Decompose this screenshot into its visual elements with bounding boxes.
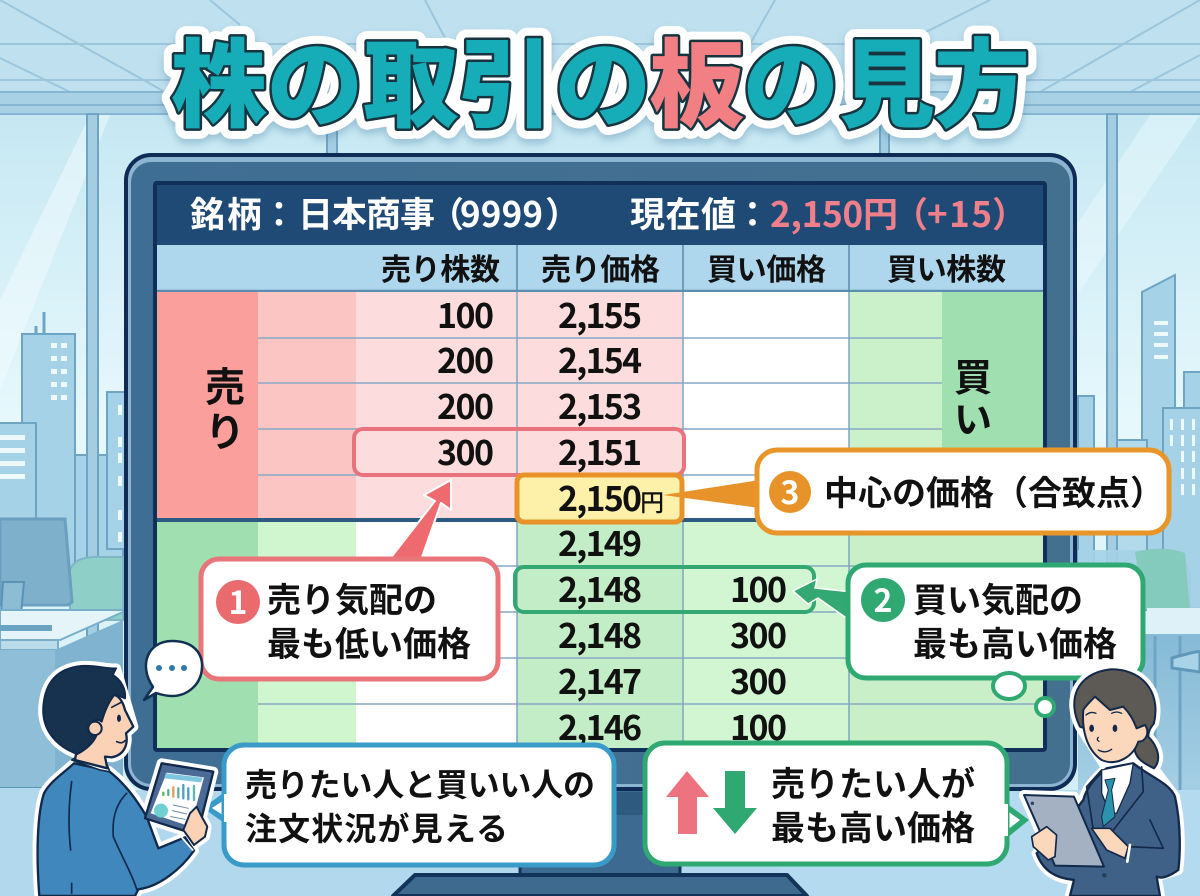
price ladder: 2,148 [558, 563, 642, 612]
title [171, 8, 1030, 147]
price ladder: 2,148 [558, 609, 642, 658]
buy quantities: 300 [730, 609, 787, 658]
buy quantities [730, 563, 787, 750]
stock name: ） [545, 187, 580, 238]
number badge 2 [861, 576, 905, 622]
sell quantities [437, 289, 494, 475]
column header row: 売り価格 [541, 245, 660, 289]
callout 1 text: 最も低い価格 [267, 617, 471, 666]
highlight: center price: 2,150円 [558, 472, 664, 521]
title dark edge: 株の取引の板の見方 [171, 8, 1030, 147]
callout 3 text: 中心の価格 [824, 466, 994, 515]
stock name: 銘柄 [190, 187, 262, 238]
current price value: +15 [927, 187, 992, 238]
current price: 現在値 [630, 187, 736, 238]
thought bubbles [993, 673, 1054, 716]
stock name: ： [262, 187, 297, 238]
number badge 1: 1 [229, 578, 247, 624]
skyline: left [0, 312, 125, 584]
column header row [157, 245, 1043, 292]
monitor frame [124, 153, 1077, 791]
icon: speech bubble [144, 641, 202, 700]
highlight: center price [517, 472, 682, 522]
price ladder [558, 289, 642, 750]
column header row: 買い株数 [887, 245, 1006, 289]
title outline: 株の取引の板の見方 [171, 8, 1030, 147]
character: man with tablet [38, 666, 213, 896]
screen: order book table [153, 181, 1047, 752]
price ladder: 2,154 [558, 334, 642, 383]
stock name: （ [429, 187, 464, 238]
sellers text: 売りたい人が [771, 757, 975, 806]
price ladder: 2,149 [558, 517, 642, 566]
price ladder: 2,155 [558, 289, 642, 338]
buy label: 買 [954, 347, 992, 402]
column header row: 買い価格 [707, 245, 826, 289]
sell label: 売 [205, 355, 245, 413]
current price value: 2,150円 [770, 187, 898, 238]
callout 1: lowest sell price [201, 480, 498, 679]
arrow: callout 1 pointer [389, 480, 451, 560]
skyline: right [1078, 275, 1200, 610]
stock name: 9999 [460, 187, 543, 238]
arrow: callout 3 pointer [663, 480, 760, 508]
current price value: （ [893, 187, 928, 238]
monitor stand [393, 745, 807, 896]
callout 3 text: 合致点 [1028, 466, 1130, 515]
sell quantities: 300 [437, 426, 494, 475]
current price value: ） [992, 187, 1027, 238]
office interior: right [1130, 553, 1190, 610]
current price: ： [735, 187, 770, 238]
sell side cells [157, 292, 1043, 520]
office interior: left [70, 557, 123, 620]
callout 1 text: 売り気配の [267, 573, 437, 622]
buy quantities: 100 [730, 701, 787, 750]
arrow: callout 2 pointer [793, 579, 852, 622]
price ladder: 2,147 [558, 655, 642, 704]
column header row: 売り株数 [381, 245, 500, 289]
sell quantities: 100 [437, 289, 494, 338]
stock name: 日本商事 [298, 187, 435, 238]
highlight: highest buy row [515, 567, 814, 612]
callout 2 text: 買い気配の [913, 573, 1083, 622]
order status text: 注文状況が見える [245, 804, 508, 850]
sell quantities: 200 [437, 334, 494, 383]
screen header band [157, 185, 1043, 245]
number badge 2: 2 [874, 576, 892, 622]
highlight: lowest sell row [354, 429, 684, 475]
character: woman with tablet [1024, 669, 1180, 896]
callout 3 text: （ [994, 466, 1028, 515]
number badge 3 [769, 468, 811, 514]
callout 3: center price [663, 450, 1169, 533]
icon: up arrow [666, 771, 709, 834]
price ladder: 2,151 [558, 426, 642, 475]
price ladder: 2,146 [558, 701, 642, 750]
buy label: い [954, 389, 992, 444]
number badge 1 [216, 578, 260, 624]
order status text: 売りたい人と買いい人の [245, 760, 595, 806]
callout 3 text: ） [1130, 466, 1164, 515]
callout: sellers [645, 743, 1029, 864]
callout 2 text: 最も高い価格 [913, 617, 1117, 666]
callout 2: highest buy price [793, 565, 1143, 716]
sell quantities: 200 [437, 380, 494, 429]
buy quantities: 100 [730, 563, 787, 612]
number badge 3: 3 [781, 468, 799, 514]
icon: down arrow [713, 771, 757, 834]
sell label: り [205, 400, 245, 458]
callout: order status [203, 745, 614, 865]
buy quantities: 300 [730, 655, 787, 704]
price ladder: 2,153 [558, 380, 642, 429]
title fill: 株の取引の板の見方 [171, 8, 1030, 147]
buy side cells [157, 520, 1043, 748]
sellers text: 最も高い価格 [771, 801, 975, 850]
